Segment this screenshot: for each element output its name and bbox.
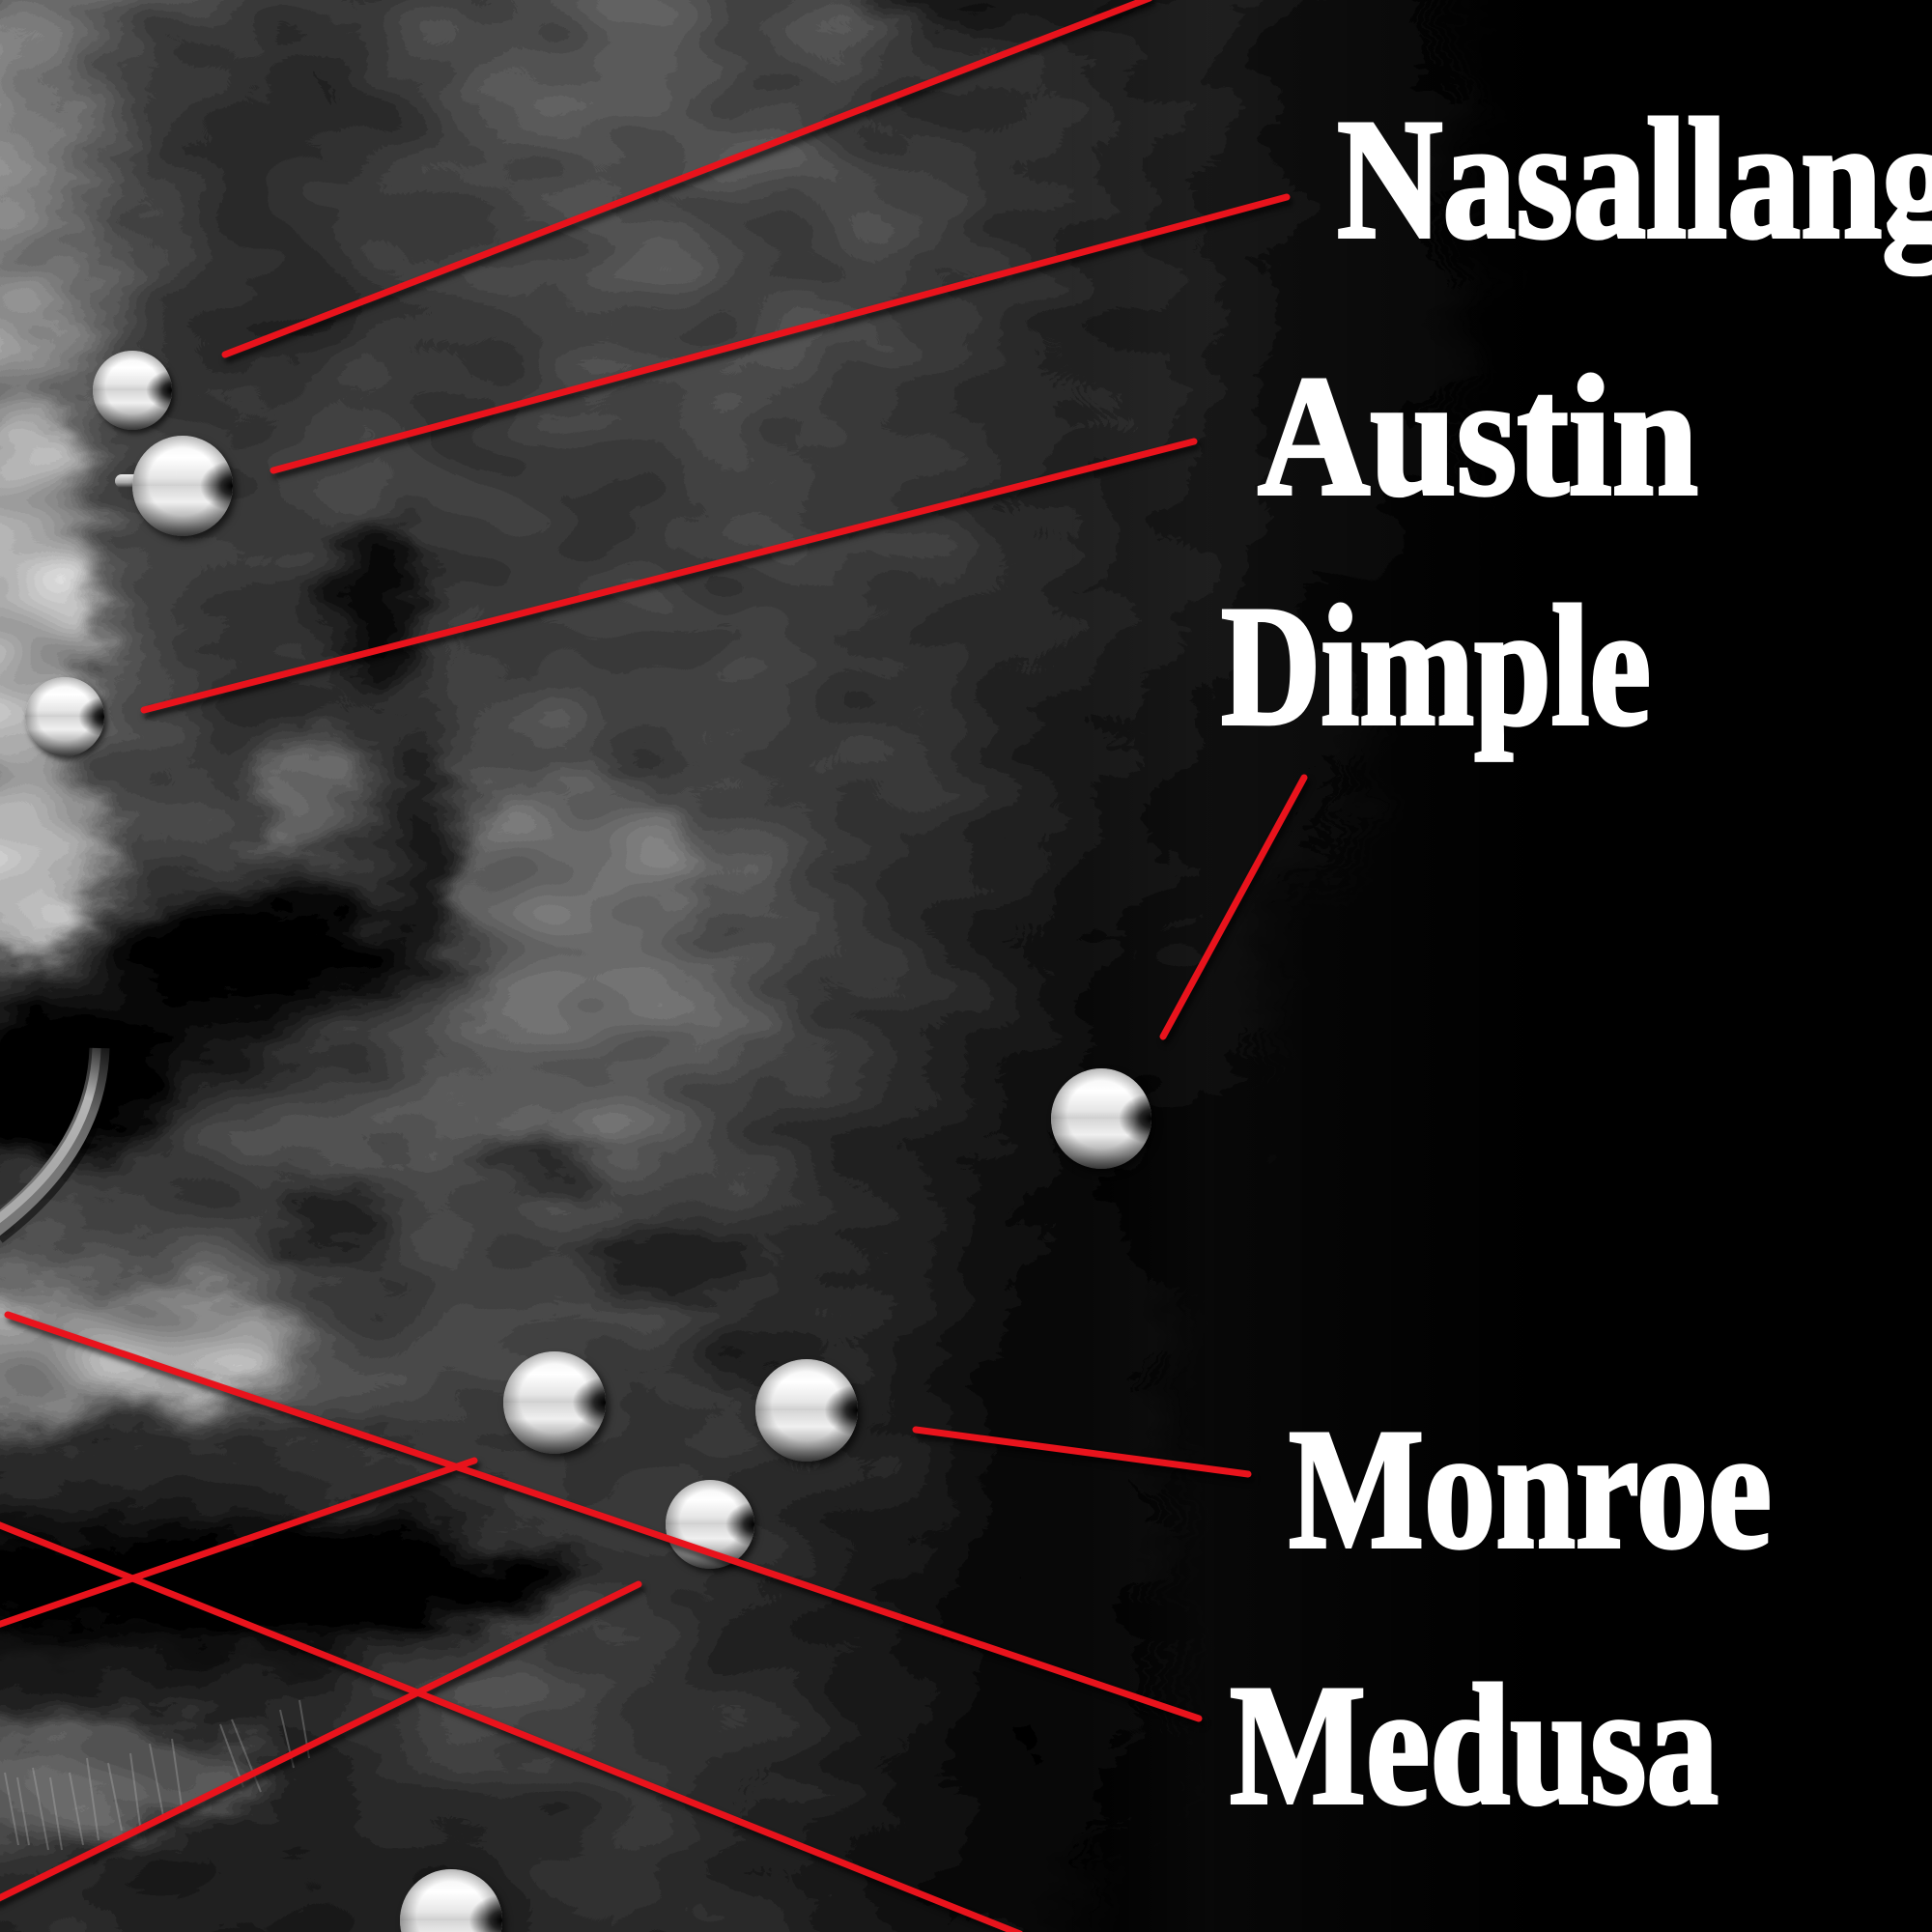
- leader: lower lip: [0, 1584, 639, 1900]
- leader: Austin: [144, 441, 1194, 710]
- pearl: bottom stud: [400, 1869, 535, 1932]
- label: Dimple: Dimple: [1221, 570, 1651, 761]
- pearl: dimple stud: [1051, 1068, 1184, 1169]
- nose ring: [0, 1048, 103, 1235]
- red leader lines: [0, 0, 1304, 1932]
- painted monochrome face portrait: [0, 0, 1450, 1932]
- leader: Nasallang: [273, 197, 1287, 470]
- label: Monroe: Monroe: [1289, 1393, 1772, 1584]
- pearl: medusa stud: [666, 1480, 783, 1569]
- leader: Monroe: [916, 1430, 1248, 1474]
- leader: top diagonal: [225, 0, 1150, 355]
- pearl: monroe right stud: [755, 1359, 891, 1462]
- leader: upper lip left: [0, 1461, 474, 1626]
- pearl: austin bar stud with stem: [115, 436, 266, 536]
- leader: Dimple: [1163, 778, 1304, 1037]
- lower lip brush streaks: [5, 1700, 309, 1850]
- pearl: nasallang upper stud: [93, 351, 198, 430]
- leader: Medusa: [8, 1315, 1199, 1719]
- leader: long lower diagonal: [0, 1523, 1020, 1932]
- label: Medusa: Medusa: [1230, 1649, 1719, 1840]
- pearl: nasallang lower stud: [25, 677, 130, 756]
- label: Austin: Austin: [1258, 340, 1698, 531]
- pearl: monroe left stud: [503, 1351, 639, 1454]
- right-side faint fade of the face into black: [1063, 0, 1546, 1932]
